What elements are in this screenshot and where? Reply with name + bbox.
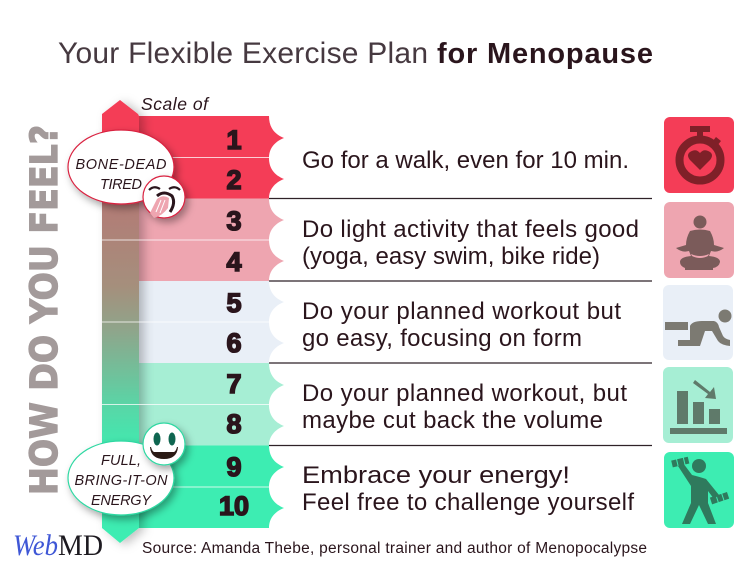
icon tile: declining bars <box>663 367 733 443</box>
scale numbers: 3 <box>226 206 242 236</box>
source: Source: Amanda Thebe, personal trainer and author of Menopocalypse <box>142 540 647 557</box>
callout: bone-dead tired: BONE-DEAD <box>76 157 166 173</box>
scale numbers: 2 <box>226 165 242 195</box>
row separators <box>269 198 652 446</box>
icon tile: dumbbell figure <box>664 452 734 528</box>
title emphasis: for Menopause <box>437 38 653 70</box>
scale numbers: 8 <box>226 409 242 439</box>
band: scale 5-6 <box>102 281 284 363</box>
icon tile: meditation <box>664 202 734 278</box>
advice: scale 5-6: go easy, focusing on form <box>302 325 582 352</box>
advice: scale 9-10 <box>302 462 634 516</box>
advice: scale 5-6: Do your planned workout but <box>302 298 621 325</box>
band dividers <box>102 158 269 487</box>
advice: scale 9-10: Embrace your energy! <box>302 462 570 489</box>
advice: scale 9-10: Feel free to challenge yourself <box>302 489 634 516</box>
scale numbers: 10 <box>219 491 249 521</box>
callout: full bring-it-on energy: BRING-IT-ON <box>74 473 168 489</box>
scale numbers: 1 <box>226 125 242 155</box>
title: Your Flexible Exercise Plan <box>58 37 428 70</box>
scale bands <box>102 116 284 528</box>
band: scale 7-8 <box>102 363 284 446</box>
scale numbers: 7 <box>226 369 242 399</box>
advice: scale 3-4: (yoga, easy swim, bike ride) <box>302 243 600 270</box>
logo: WebMD: Web <box>13 529 58 562</box>
icon: yawning face <box>143 176 185 218</box>
icon tile: crawling figure <box>663 285 733 360</box>
scale of label: Scale of <box>141 94 210 114</box>
callout: bone-dead tired <box>68 130 185 218</box>
advice: scale 7-8 <box>302 380 627 434</box>
gradient scale arrow <box>102 100 139 543</box>
scale numbers: 9 <box>226 452 242 482</box>
icon: smiling face <box>143 423 185 465</box>
icon tile: stopwatch <box>664 117 734 193</box>
vertical axis label: HOW DO YOU FEEL? <box>23 125 66 495</box>
callout: full bring-it-on energy: ENERGY <box>91 493 152 509</box>
logo: WebMD <box>13 529 103 562</box>
scale numbers: 4 <box>226 247 242 277</box>
band: scale 1-2 <box>102 116 284 198</box>
advice: scale 1-2: Go for a walk, even for 10 min. <box>302 147 629 174</box>
callout: bone-dead tired: TIRED <box>100 177 142 193</box>
band: scale 3-4 <box>102 198 284 281</box>
advice: scale 7-8: Do your planned workout, but <box>302 380 627 407</box>
scale numbers <box>219 125 249 521</box>
advice: scale 5-6 <box>302 298 621 352</box>
scale numbers: 5 <box>226 288 242 318</box>
band: scale 9-10 <box>102 446 284 528</box>
scale numbers: 6 <box>226 328 242 358</box>
advice: scale 7-8: maybe cut back the volume <box>302 407 603 434</box>
callout: full bring-it-on energy <box>68 423 185 515</box>
callout: full bring-it-on energy: FULL, <box>101 453 141 469</box>
advice: scale 3-4 <box>302 216 639 270</box>
logo: WebMD: MD <box>58 529 103 562</box>
advice: scale 3-4: Do light activity that feels good <box>302 216 639 243</box>
